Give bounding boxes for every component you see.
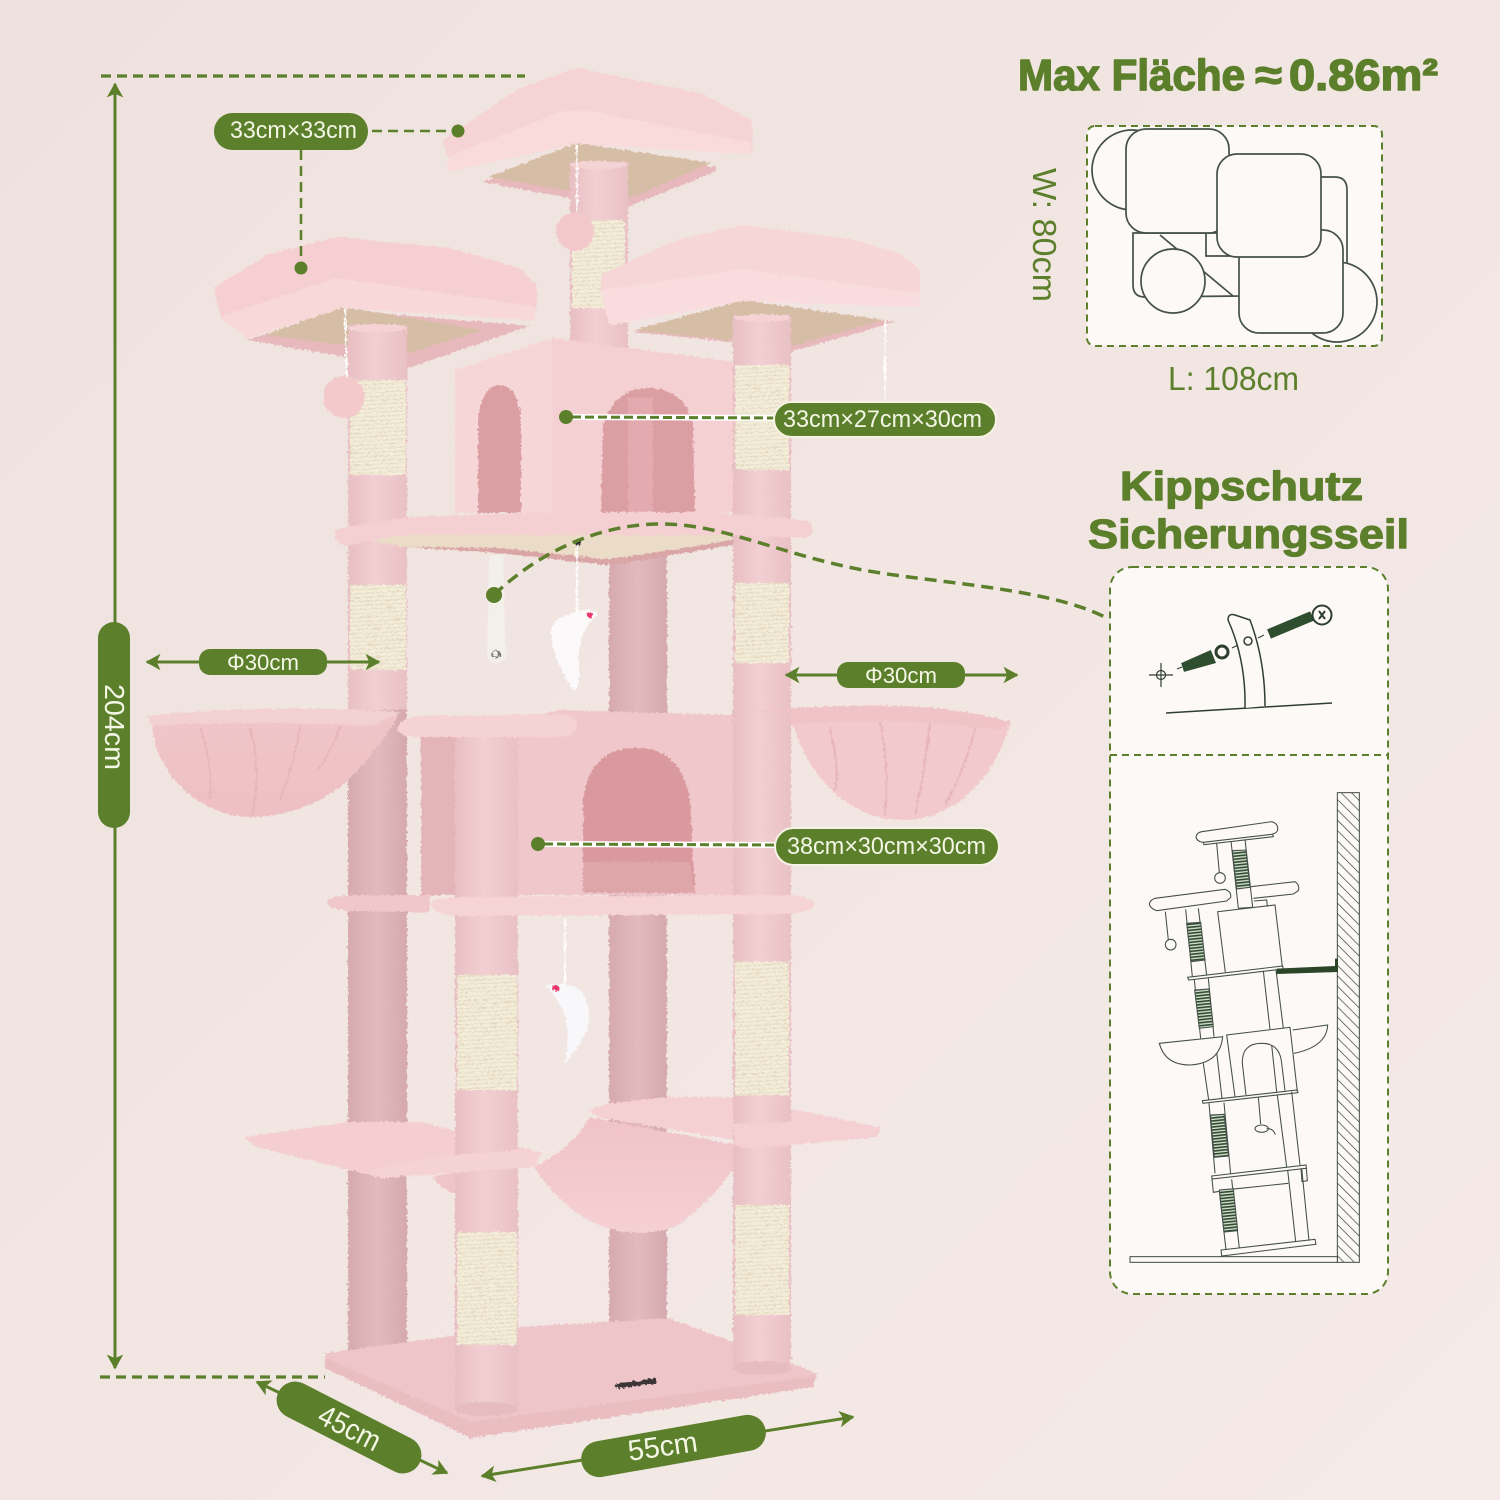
- callout: top perch size: 33cm×33cm: [230, 117, 357, 144]
- wall: [1130, 793, 1359, 1262]
- right platform front edge: [733, 1122, 880, 1149]
- back left post: [348, 325, 407, 1369]
- left platform front edge: [370, 1150, 542, 1178]
- heading: max area: Max Fläche: [1018, 51, 1245, 100]
- width dimension 55cm: [482, 1412, 853, 1480]
- heading: max area: 0.86m²: [1289, 51, 1438, 100]
- connector curve to safety panel: [486, 524, 1105, 617]
- left platform: [245, 1122, 542, 1178]
- safety strap: [1277, 959, 1338, 974]
- callout: upper house size: 33cm×27cm×30cm: [783, 406, 982, 433]
- top toy ball: [556, 145, 594, 251]
- heading: max area: ≈: [1255, 51, 1282, 100]
- label: width 80cm: W: 80cm: [1026, 168, 1063, 302]
- left hammock bowl: [148, 709, 400, 817]
- heading: anti-tip safety: Kippschutz: [1120, 463, 1363, 509]
- top perch: [447, 72, 748, 220]
- lower level platform: [326, 895, 815, 916]
- toy mouse lower: [545, 918, 589, 1063]
- depth dimension 45cm: 45cm: [312, 1399, 386, 1458]
- left post diameter: [147, 649, 379, 675]
- icon: wall bracket and screw: [1149, 606, 1332, 713]
- heading: anti-tip safety: [1088, 463, 1409, 557]
- right post diameter: [786, 662, 1017, 688]
- strap and toy mouse upper: [487, 540, 598, 692]
- left perch: [218, 241, 533, 380]
- panel: footprint area: [1087, 126, 1382, 346]
- back centre post: [609, 555, 667, 1323]
- heading: max area: [1018, 51, 1438, 100]
- height dimension: [98, 76, 525, 1377]
- upper level platform underside: [371, 530, 735, 565]
- height pill: [98, 622, 130, 828]
- callout: upper house size: [559, 402, 996, 437]
- hammock: [432, 1117, 746, 1233]
- upper house: [455, 338, 735, 513]
- callout: lower house size: [531, 828, 999, 865]
- left post diameter: Φ30cm: [227, 650, 299, 675]
- depth dimension 45cm: [257, 1375, 447, 1480]
- top post: [570, 162, 628, 352]
- lower house: [421, 710, 791, 897]
- panel: safety instructions: [1110, 567, 1388, 1294]
- upper level platform: [334, 512, 813, 546]
- left toy ball: [323, 308, 365, 418]
- callout: top perch size: [214, 113, 464, 274]
- front post: [455, 915, 518, 1416]
- right hammock bowl: [730, 706, 1010, 820]
- height pill: 204cm: [99, 684, 130, 770]
- tree line art: [1149, 822, 1328, 1256]
- diagram: tree secured to wall: [1130, 793, 1359, 1262]
- lower house small top and post: [397, 714, 577, 917]
- width dimension 55cm: 55cm: [626, 1426, 700, 1468]
- footprint shapes: [1092, 129, 1377, 342]
- right post: [733, 315, 791, 1375]
- base: [325, 1318, 817, 1438]
- label: length 108cm: L: 108cm: [1168, 360, 1299, 397]
- callout: lower house size: 38cm×30cm×30cm: [787, 833, 986, 860]
- right platform: [588, 1097, 880, 1147]
- right perch: [604, 229, 917, 402]
- cat tree illustration: [148, 72, 1010, 1438]
- right post diameter: Φ30cm: [865, 663, 937, 688]
- heading: anti-tip safety: Sicherungsseil: [1088, 511, 1409, 557]
- right post over house: [733, 315, 791, 550]
